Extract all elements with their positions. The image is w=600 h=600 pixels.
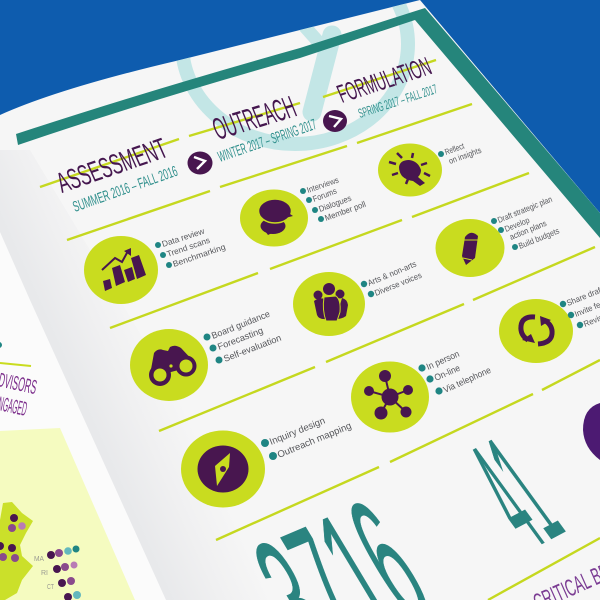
map dots bbox=[0, 514, 81, 600]
heading: formulation: FORMULATION bbox=[333, 51, 436, 109]
list: governance bbox=[210, 309, 283, 364]
list: planning: Build budgets bbox=[517, 225, 561, 251]
list: revision bbox=[565, 283, 600, 329]
list: planning: Draft strategic plan bbox=[496, 194, 554, 225]
list: conversations: Member poll bbox=[323, 199, 367, 223]
list: assessment data bbox=[161, 226, 227, 269]
icon: compass bbox=[181, 430, 265, 508]
list: conversations: Interviews bbox=[305, 175, 340, 195]
list: assessment data: Trend scans bbox=[165, 235, 211, 259]
list: voices: Arts & non-arts bbox=[366, 259, 418, 288]
list: inquiry: Outreach mapping bbox=[276, 421, 353, 461]
icon: pencil bbox=[436, 219, 504, 277]
icon: people bbox=[293, 272, 365, 336]
list: channels bbox=[425, 349, 492, 395]
heading: assessment: ASSESSMENT bbox=[52, 133, 173, 199]
left page rule bbox=[0, 363, 31, 366]
list: reflect: on insights bbox=[447, 145, 483, 166]
top teal band bbox=[16, 8, 600, 238]
list: assessment data: Data review bbox=[161, 226, 206, 249]
list: reflect: Reflect bbox=[443, 140, 466, 157]
heading: outreach: OUTREACH bbox=[207, 89, 301, 147]
icon: network bbox=[351, 362, 429, 432]
phase headings bbox=[52, 51, 439, 216]
icon: refresh bbox=[499, 299, 573, 363]
list: channels: In person bbox=[425, 349, 461, 372]
bullet dots bbox=[155, 151, 583, 460]
map labels: CT bbox=[47, 584, 55, 591]
list: voices bbox=[366, 259, 423, 298]
list: governance: Forecasting bbox=[216, 325, 265, 352]
list: assessment data: Benchmarking bbox=[171, 241, 227, 269]
left page heading bbox=[0, 368, 39, 421]
list: channels: On-line bbox=[433, 363, 462, 383]
list: conversations: Dialogues bbox=[317, 193, 353, 214]
icon: speech bubbles bbox=[240, 190, 308, 246]
map panel bbox=[0, 428, 135, 600]
subheading: assessment dates: SUMMER 2016 – FALL 2016 bbox=[71, 163, 180, 216]
list: planning bbox=[496, 194, 561, 251]
arrow badge 1 bbox=[188, 152, 212, 174]
list: inquiry: Inquiry design bbox=[268, 415, 327, 448]
icon: light bulb bbox=[378, 144, 442, 196]
map labels: RI bbox=[41, 570, 48, 577]
gutter shadow bbox=[0, 150, 300, 600]
map labels bbox=[34, 556, 55, 591]
left page teal dot bbox=[0, 342, 2, 348]
list: planning: action plans bbox=[508, 218, 548, 242]
arrow badge 2 bbox=[323, 110, 347, 132]
subheading: formulation dates: SPRING 2017 – FALL 2017 bbox=[356, 81, 439, 121]
icon: bar chart bbox=[84, 236, 158, 304]
list: channels: Via telephone bbox=[442, 365, 492, 395]
list: governance: Board guidance bbox=[210, 309, 271, 341]
purple shape at right edge bbox=[583, 403, 600, 460]
map shape bbox=[0, 502, 33, 600]
map labels: MA bbox=[34, 556, 44, 563]
icon: binoculars bbox=[130, 329, 208, 401]
list: voices: Diverse voices bbox=[373, 270, 423, 298]
list: governance: Self-evaluation bbox=[222, 333, 283, 364]
list: conversations bbox=[305, 175, 367, 223]
subheading: outreach dates: WINTER 2017 – SPRING 2017 bbox=[216, 116, 319, 166]
list: planning: Develop bbox=[503, 215, 531, 234]
left page bbox=[0, 232, 166, 600]
list: conversations: Forums bbox=[311, 186, 338, 204]
decorative ring bbox=[182, 0, 408, 144]
